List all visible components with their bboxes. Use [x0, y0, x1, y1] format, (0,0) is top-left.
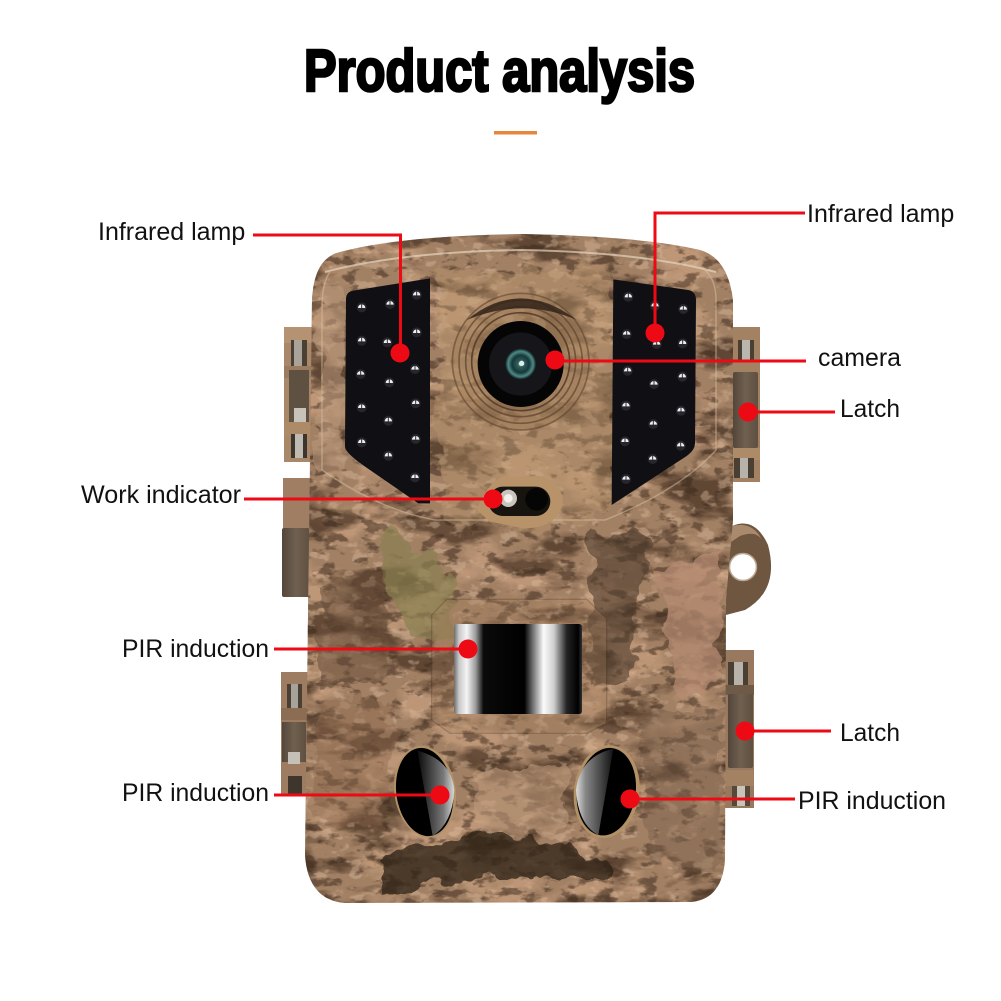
- camouflage texture layers: [300, 228, 740, 908]
- trail camera device: [281, 228, 771, 908]
- left middle latch: [282, 478, 323, 597]
- right mounting lug with hole: [722, 524, 771, 616]
- callout: camera: [546, 344, 901, 372]
- left lower latch hinge: [281, 672, 321, 796]
- camera body with camouflage: [300, 228, 740, 908]
- callout: infrared lamp left: Infrared lamp: [98, 218, 245, 246]
- callout: PIR induction lower left: [122, 779, 450, 807]
- callout: PIR induction lower right: [620, 787, 946, 815]
- callout: PIR induction lower left: PIR induction: [122, 779, 269, 807]
- left PIR sensor: [388, 742, 462, 841]
- callout: work indicator: [81, 481, 502, 509]
- callout: latch upper: [738, 395, 900, 423]
- right infrared lamp panel: [612, 279, 696, 505]
- callout: PIR induction center: [122, 635, 478, 663]
- title: Product analysis: [304, 38, 695, 104]
- callout: work indicator: Work indicator: [81, 481, 241, 509]
- callout: camera: camera: [818, 344, 901, 372]
- main PIR sensor lens: [454, 624, 582, 714]
- bottom dark branch band: [385, 836, 612, 895]
- callout: latch upper: Latch: [840, 395, 900, 423]
- lower detail: traced at 3x: [388, 599, 646, 842]
- callout: infrared lamp right: Infrared lamp: [807, 200, 954, 228]
- front panel edge highlight: [325, 250, 716, 272]
- callout: PIR induction lower right: PIR induction: [798, 787, 946, 815]
- callout: infrared lamp left: [98, 218, 410, 362]
- callout: latch lower: Latch: [840, 719, 900, 747]
- callout: PIR induction center: PIR induction: [122, 635, 269, 663]
- camouflage colour patches: [310, 270, 722, 870]
- main PIR sensor housing: [432, 599, 607, 733]
- left infrared lamp panel: [345, 278, 430, 503]
- right PIR sensor: [568, 741, 646, 842]
- upper detail: traced at 3x: [345, 278, 696, 528]
- camera lens assembly: [452, 293, 589, 430]
- right lower latch hinge: [712, 650, 754, 808]
- left upper latch hinge: [284, 327, 324, 462]
- work indicator window: [477, 476, 563, 528]
- right upper latch hinge: [716, 327, 760, 482]
- orange accent bar: [494, 131, 537, 134]
- callout: infrared lamp right: [646, 200, 954, 342]
- callout: latch lower: [736, 719, 900, 747]
